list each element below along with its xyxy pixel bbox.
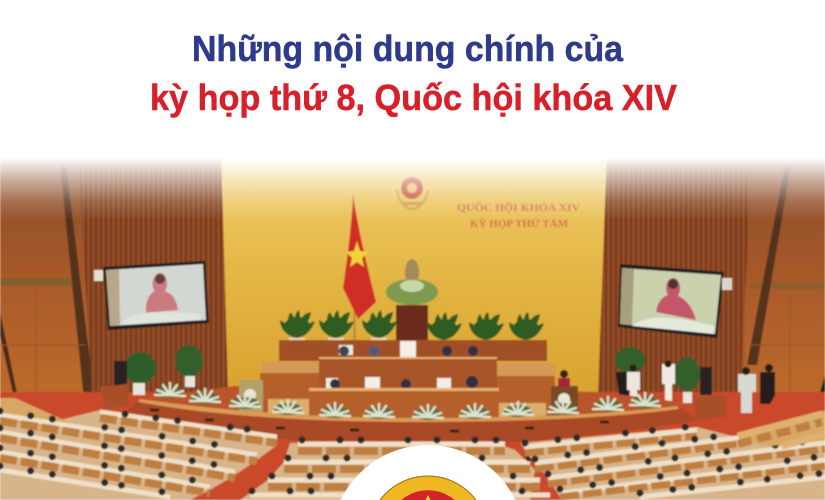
white chairs and delegates lower bbox=[326, 376, 478, 390]
title: Những nội dung chính của bbox=[192, 28, 624, 69]
camera right bbox=[722, 278, 732, 290]
badge gold ring bbox=[380, 476, 476, 500]
lecterns bbox=[239, 380, 578, 416]
right screen bbox=[618, 264, 724, 338]
left slatted panel bbox=[78, 150, 228, 400]
front stage rail bbox=[127, 399, 698, 445]
delegate seating: center block bbox=[240, 440, 550, 500]
speaker at right bbox=[558, 370, 570, 387]
delegate seating: far right block bbox=[737, 411, 825, 446]
rostrum bbox=[396, 305, 428, 358]
delegate seating: left block bbox=[0, 398, 277, 500]
side cabinets bbox=[100, 384, 726, 420]
right slatted panel bbox=[598, 150, 752, 400]
wall text: KỲ HỌP THỨ TÁM bbox=[470, 218, 569, 230]
badge red centre bbox=[401, 490, 455, 500]
plants on stage bbox=[280, 310, 544, 343]
delegate seating: right block bbox=[520, 426, 825, 500]
lower desk bbox=[309, 388, 499, 419]
wall text: QUỐC HỘI KHÓA XIV bbox=[457, 201, 580, 214]
national emblem bbox=[397, 177, 428, 209]
middle desk bbox=[319, 357, 497, 390]
camera left bbox=[94, 270, 103, 281]
photo base bbox=[0, 150, 825, 500]
badge ring outline bbox=[380, 476, 476, 500]
stage platform bbox=[140, 386, 680, 424]
side stage left bbox=[260, 362, 322, 401]
flag bbox=[343, 193, 376, 342]
upper desk bbox=[279, 340, 547, 361]
white fade over photo top bbox=[0, 142, 825, 220]
title: kỳ họp thứ 8, Quốc hội khóa XIV bbox=[150, 77, 677, 118]
side plants and press right bbox=[615, 347, 775, 413]
far right wall bbox=[745, 150, 825, 410]
left screen bbox=[103, 261, 209, 330]
wall text bbox=[457, 201, 580, 230]
photo: National Assembly hall bbox=[0, 142, 825, 500]
white chairs and delegates upper bbox=[339, 341, 478, 357]
emblem badge bbox=[341, 445, 515, 500]
stage side blocks bbox=[268, 399, 546, 418]
red carpet floor bbox=[0, 392, 825, 500]
stage flowers bbox=[155, 383, 660, 420]
side plants left bbox=[114, 345, 203, 395]
side stage right bbox=[495, 363, 555, 406]
far left wall bbox=[0, 150, 95, 405]
title bbox=[150, 28, 677, 118]
badge star bbox=[426, 495, 430, 500]
bust and flowers bbox=[386, 259, 438, 305]
back wall bbox=[210, 150, 610, 410]
